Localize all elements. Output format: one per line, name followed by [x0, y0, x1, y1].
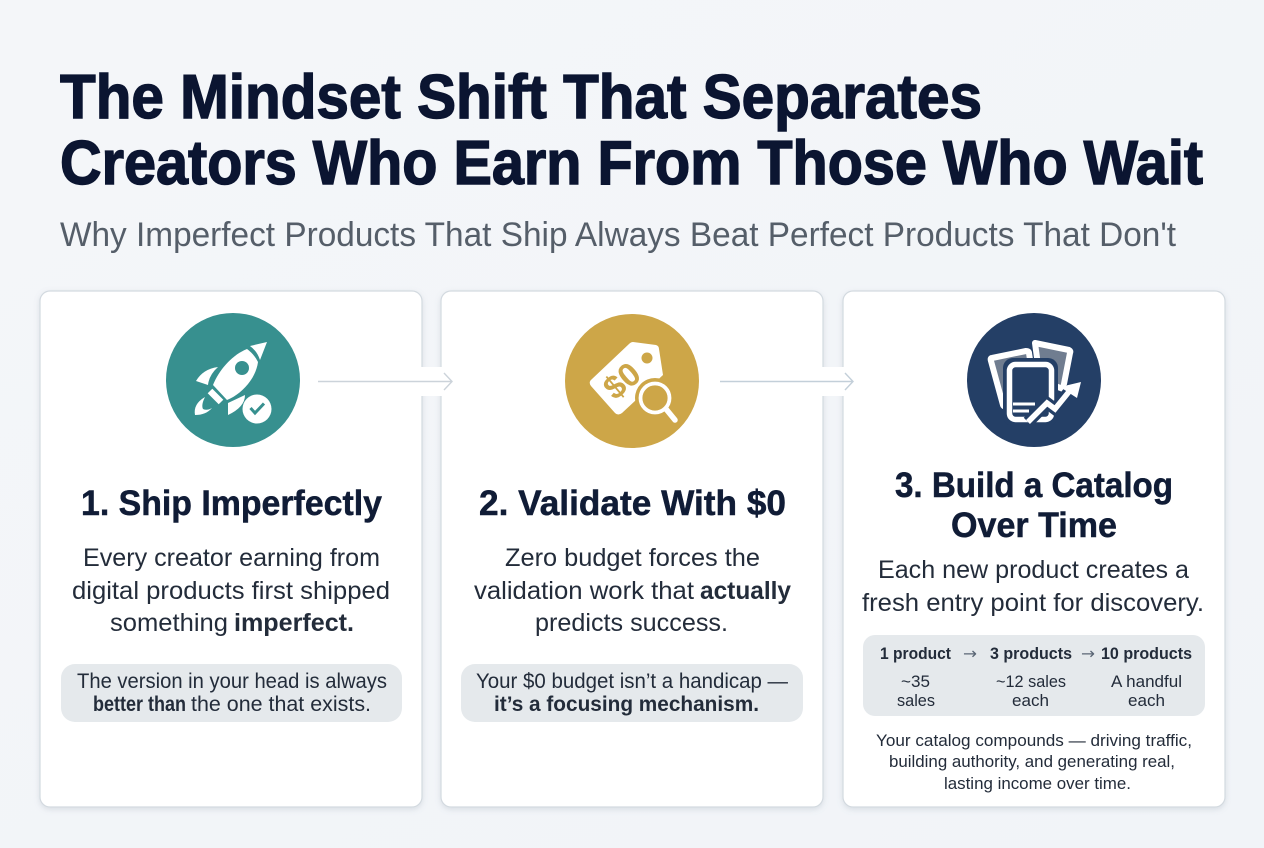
catalog progression table: ~35	[901, 672, 930, 691]
callout 1: the one that exists.	[191, 693, 371, 716]
callout 2: it’s a focusing mechanism.	[494, 693, 759, 716]
body text 1: Every creator earning from	[83, 544, 380, 572]
catalog progression table: 1 product	[880, 644, 951, 663]
icon: rocket with check	[166, 313, 300, 447]
catalog progression table: →	[963, 644, 977, 663]
callout 2: Your $0 budget isn’t a handicap —	[476, 670, 788, 693]
arrow: step 2 to step 3	[720, 367, 853, 396]
catalog progression table	[863, 635, 1205, 716]
body text 1	[72, 544, 390, 637]
heading 1: 1. Ship Imperfectly	[81, 484, 383, 523]
closing note: Your catalog compounds — driving traffic,	[876, 731, 1192, 750]
heading 3	[895, 466, 1173, 545]
title: Creators Who Earn From Those Who Wait	[60, 129, 1203, 198]
body text 2: actually	[700, 577, 791, 605]
body text 1: something	[110, 609, 228, 637]
heading 2: 2. Validate With $0	[479, 484, 786, 523]
body text 2: predicts success.	[535, 609, 728, 637]
title: The Mindset Shift That Separates	[60, 63, 982, 132]
closing note: lasting income over time.	[944, 774, 1131, 793]
callout 1	[61, 664, 402, 722]
catalog progression table: 3 products	[990, 644, 1072, 663]
card background 1	[40, 291, 422, 807]
body text 3	[862, 556, 1204, 617]
body text 1: imperfect.	[234, 609, 354, 637]
closing note: building authority, and generating real,	[889, 752, 1175, 771]
catalog progression table: ~12 sales	[996, 672, 1066, 691]
title	[60, 63, 1203, 198]
icon: product catalog with growth arrow	[967, 313, 1101, 447]
catalog progression table: 10 products	[1101, 644, 1192, 663]
callout 1: The version in your head is always	[77, 670, 387, 693]
catalog progression table: each	[1012, 691, 1049, 710]
body text 3: Each new product creates a	[878, 556, 1189, 584]
panel: ship imperfectly	[40, 291, 422, 807]
body text 2: validation work that	[474, 577, 694, 605]
catalog progression table: sales	[897, 691, 935, 710]
panel: build a catalog	[843, 291, 1225, 807]
body text 2	[474, 544, 791, 637]
heading 3: 3. Build a Catalog	[895, 466, 1173, 505]
body text 1: digital products first shipped	[72, 577, 390, 605]
card background 3	[843, 291, 1225, 807]
card background 2	[441, 291, 823, 807]
catalog progression table: →	[1081, 644, 1095, 663]
catalog progression table: A handful	[1111, 672, 1182, 691]
callout 2	[461, 664, 803, 722]
body text 3: fresh entry point for discovery.	[862, 589, 1204, 617]
closing note	[876, 731, 1192, 793]
subtitle: Why Imperfect Products That Ship Always Beat Perfect Products That Don't	[60, 216, 1177, 254]
icon: price tag with magnifier	[565, 314, 699, 448]
body text 2: Zero budget forces the	[505, 544, 760, 572]
heading 3: Over Time	[951, 506, 1117, 545]
panel: validate with $0	[441, 291, 823, 807]
arrow: step 1 to step 2	[318, 367, 452, 396]
catalog progression table: each	[1128, 691, 1165, 710]
callout 1: better than	[93, 693, 186, 716]
icon: price tag with magnifier: $0	[596, 355, 648, 407]
